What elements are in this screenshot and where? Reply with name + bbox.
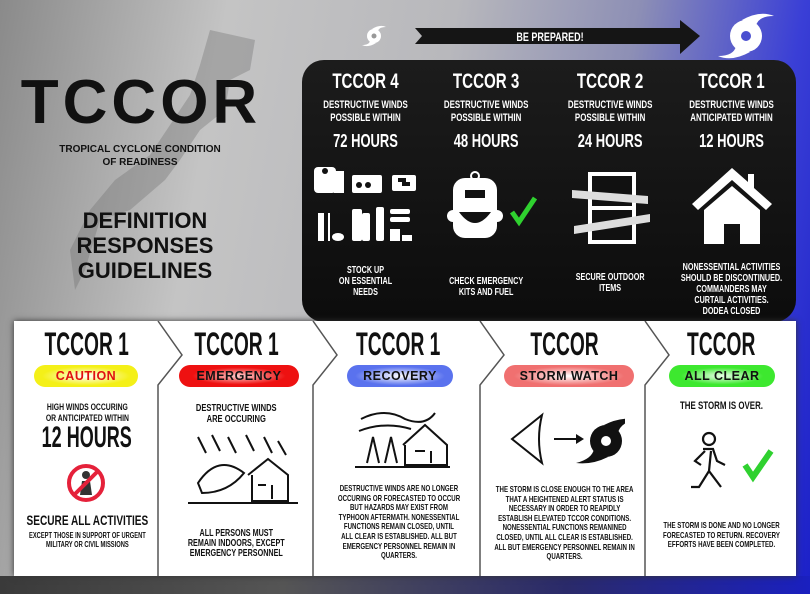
icon: small cyclone xyxy=(362,26,386,46)
text: check kits: CHECK EMERGENCY xyxy=(449,276,523,287)
panel: TCCOR levels xyxy=(302,60,796,322)
column: TCCOR 4: 72 HOURS xyxy=(333,131,397,151)
text: nonessential: CURTAIL ACTIVITIES. xyxy=(694,295,768,306)
card: caution: EXCEPT THOSE IN SUPPORT OF URGENT xyxy=(29,531,145,540)
text: stock up: ON ESSENTIAL xyxy=(338,276,392,287)
column: TCCOR 3 xyxy=(444,70,528,151)
card: caution: MILITARY OR CIVIL MISSIONS xyxy=(46,540,128,549)
section list: RESPONSES xyxy=(77,233,213,258)
text: secure outdoor xyxy=(576,272,644,294)
column: TCCOR 3: 48 HOURS xyxy=(454,131,518,151)
subtitle: OF READINESS xyxy=(102,157,178,168)
column: TCCOR 4: TCCOR 4 xyxy=(332,70,398,93)
column: TCCOR 1 xyxy=(689,70,774,151)
card: caution: TCCOR 1 xyxy=(45,326,129,362)
card: emergency: EMERGENCY PERSONNEL xyxy=(190,548,283,559)
title: TCCOR xyxy=(21,68,261,137)
card: emergency: ARE OCCURING xyxy=(207,413,266,425)
column: TCCOR 4 xyxy=(323,70,408,151)
subtitle: TROPICAL CYCLONE CONDITION xyxy=(59,144,221,155)
card: all clear: THE STORM IS DONE AND NO LONGER xyxy=(663,520,780,530)
card: storm watch: QUARTERS. xyxy=(546,551,583,561)
text: nonessential: NONESSENTIAL ACTIVITIES xyxy=(682,262,780,273)
column: TCCOR 1: DESTRUCTIVE WINDS xyxy=(689,99,773,111)
card: storm watch: THE STORM IS CLOSE ENOUGH TO THE AREA xyxy=(496,484,633,494)
column: TCCOR 2: TCCOR 2 xyxy=(577,70,643,93)
text: check kits: KITS AND FUEL xyxy=(459,287,513,298)
panel: response phases xyxy=(14,321,796,576)
arrow: be prepared: BE PREPARED! xyxy=(516,31,584,44)
card: emergency: DESTRUCTIVE WINDS xyxy=(196,402,277,414)
text: secure outdoor: SECURE OUTDOOR xyxy=(576,272,644,283)
column: TCCOR 1: 12 HOURS xyxy=(699,131,763,151)
card: storm watch: ESTABLISH ELEVATED TCCOR CONDITIONS. xyxy=(498,513,631,523)
card: recovery: RECOVERY xyxy=(363,369,437,383)
bottom dark strip xyxy=(0,576,810,594)
card: storm watch: ALL BUT EMERGENCY PERSONNEL REMAIN IN xyxy=(494,542,635,552)
card: caution xyxy=(26,326,148,549)
icon: no walking xyxy=(67,464,105,502)
icon: backpack with check xyxy=(447,171,537,238)
card: storm watch: NONESSENTIAL FUNCTIONS REMANINED xyxy=(503,522,627,532)
card: recovery: DESTRUCTIVE WINDS ARE NO LONGER xyxy=(339,483,458,493)
card: recovery: TCCOR 1 xyxy=(356,326,441,362)
column: TCCOR 3: POSSIBLE WITHIN xyxy=(451,112,521,124)
text: check kits xyxy=(449,276,523,298)
card: caution: OR ANTICIPATED WITHIN xyxy=(45,413,129,424)
card: emergency: ALL PERSONS MUST xyxy=(200,528,273,539)
text: secure outdoor: ITEMS xyxy=(599,283,621,294)
card: caution: HIGH WINDS OCCURING xyxy=(47,402,127,413)
card: recovery: FUNCTIONS REMAIN CLOSED, UNTIL xyxy=(343,521,454,531)
card: emergency: EMERGENCY xyxy=(196,369,282,383)
card: emergency: TCCOR 1 xyxy=(194,326,279,362)
icon: boarded window xyxy=(572,172,650,244)
card: caution: 12 HOURS xyxy=(42,421,132,454)
card: caution: SECURE ALL ACTIVITIES xyxy=(26,512,148,528)
text: nonessential: SHOULD BE DISCONTINUED. xyxy=(680,273,782,284)
card: recovery xyxy=(337,326,460,560)
icon: walking person with check xyxy=(691,432,774,488)
card: recovery: ALL CLEAR IS ESTABLISHED. ALL BUT xyxy=(341,531,456,541)
column: TCCOR 2: 24 HOURS xyxy=(578,131,642,151)
card: recovery: TYPHOON AFTERMATH. NONESSENTIAL xyxy=(338,512,459,522)
subtitle xyxy=(59,144,221,168)
column: TCCOR 2 xyxy=(568,70,652,151)
icon: supplies xyxy=(314,167,416,241)
section list: GUIDELINES xyxy=(78,258,212,283)
column: TCCOR 3: DESTRUCTIVE WINDS xyxy=(444,99,528,111)
card: recovery: QUARTERS. xyxy=(380,550,417,560)
icon: eye watching storm xyxy=(510,412,625,466)
column: TCCOR 2: DESTRUCTIVE WINDS xyxy=(568,99,652,111)
card: storm watch: TCCOR xyxy=(530,326,599,362)
icon: aftermath xyxy=(355,412,450,468)
card: caution: CAUTION xyxy=(56,369,116,383)
card: all clear xyxy=(663,326,780,549)
card: all clear: THE STORM IS OVER. xyxy=(680,400,763,412)
card: recovery: EMERGENCY PERSONNEL REMAIN IN xyxy=(342,541,455,551)
column: TCCOR 4: DESTRUCTIVE WINDS xyxy=(323,99,407,111)
card: emergency: REMAIN INDOORS, EXCEPT xyxy=(188,538,285,549)
text: stock up xyxy=(338,265,392,298)
section list: DEFINITION xyxy=(83,208,207,233)
card: storm watch: NECESSARY IN ORDER TO REAPIDLY xyxy=(509,503,620,513)
card: emergency xyxy=(179,326,299,559)
column: TCCOR 2: POSSIBLE WITHIN xyxy=(575,112,645,124)
card: recovery: OCCURING OR FORECASTED TO OCCUR xyxy=(337,493,460,503)
arrow: be prepared xyxy=(362,14,774,58)
card: storm watch: THAT A HEIGHTENED ALERT STATUS IS xyxy=(506,494,623,504)
column: TCCOR 1: TCCOR 1 xyxy=(698,70,764,93)
text: nonessential xyxy=(680,262,782,317)
column: TCCOR 1: ANTICIPATED WITHIN xyxy=(690,112,772,124)
icon: house xyxy=(692,168,772,244)
card: storm watch xyxy=(494,326,635,561)
card: all clear: FORECASTED TO RETURN. RECOVERY xyxy=(663,530,780,540)
column: TCCOR 4: POSSIBLE WITHIN xyxy=(330,112,400,124)
text: nonessential: DODEA CLOSED xyxy=(702,306,760,317)
text: stock up: STOCK UP xyxy=(346,265,384,276)
card: all clear: ALL CLEAR xyxy=(684,369,760,383)
section list xyxy=(77,208,213,283)
card: storm watch: CLOSED, UNTIL ALL CLEAR IS ESTABLISHED. xyxy=(496,532,633,542)
icon: storm house xyxy=(188,434,298,504)
icon: large cyclone xyxy=(718,14,774,58)
card: storm watch: STORM WATCH xyxy=(520,369,618,383)
text: nonessential: COMMANDERS MAY xyxy=(696,284,766,295)
text: stock up: NEEDS xyxy=(353,287,377,298)
card: all clear: TCCOR xyxy=(687,326,756,362)
column: TCCOR 3: TCCOR 3 xyxy=(453,70,519,93)
island silhouette xyxy=(70,30,255,290)
card: all clear: EFFORTS HAVE BEEN COMPLETED. xyxy=(668,539,775,549)
card: recovery: BUT HAZARDS MAY EXIST FROM xyxy=(350,502,447,512)
